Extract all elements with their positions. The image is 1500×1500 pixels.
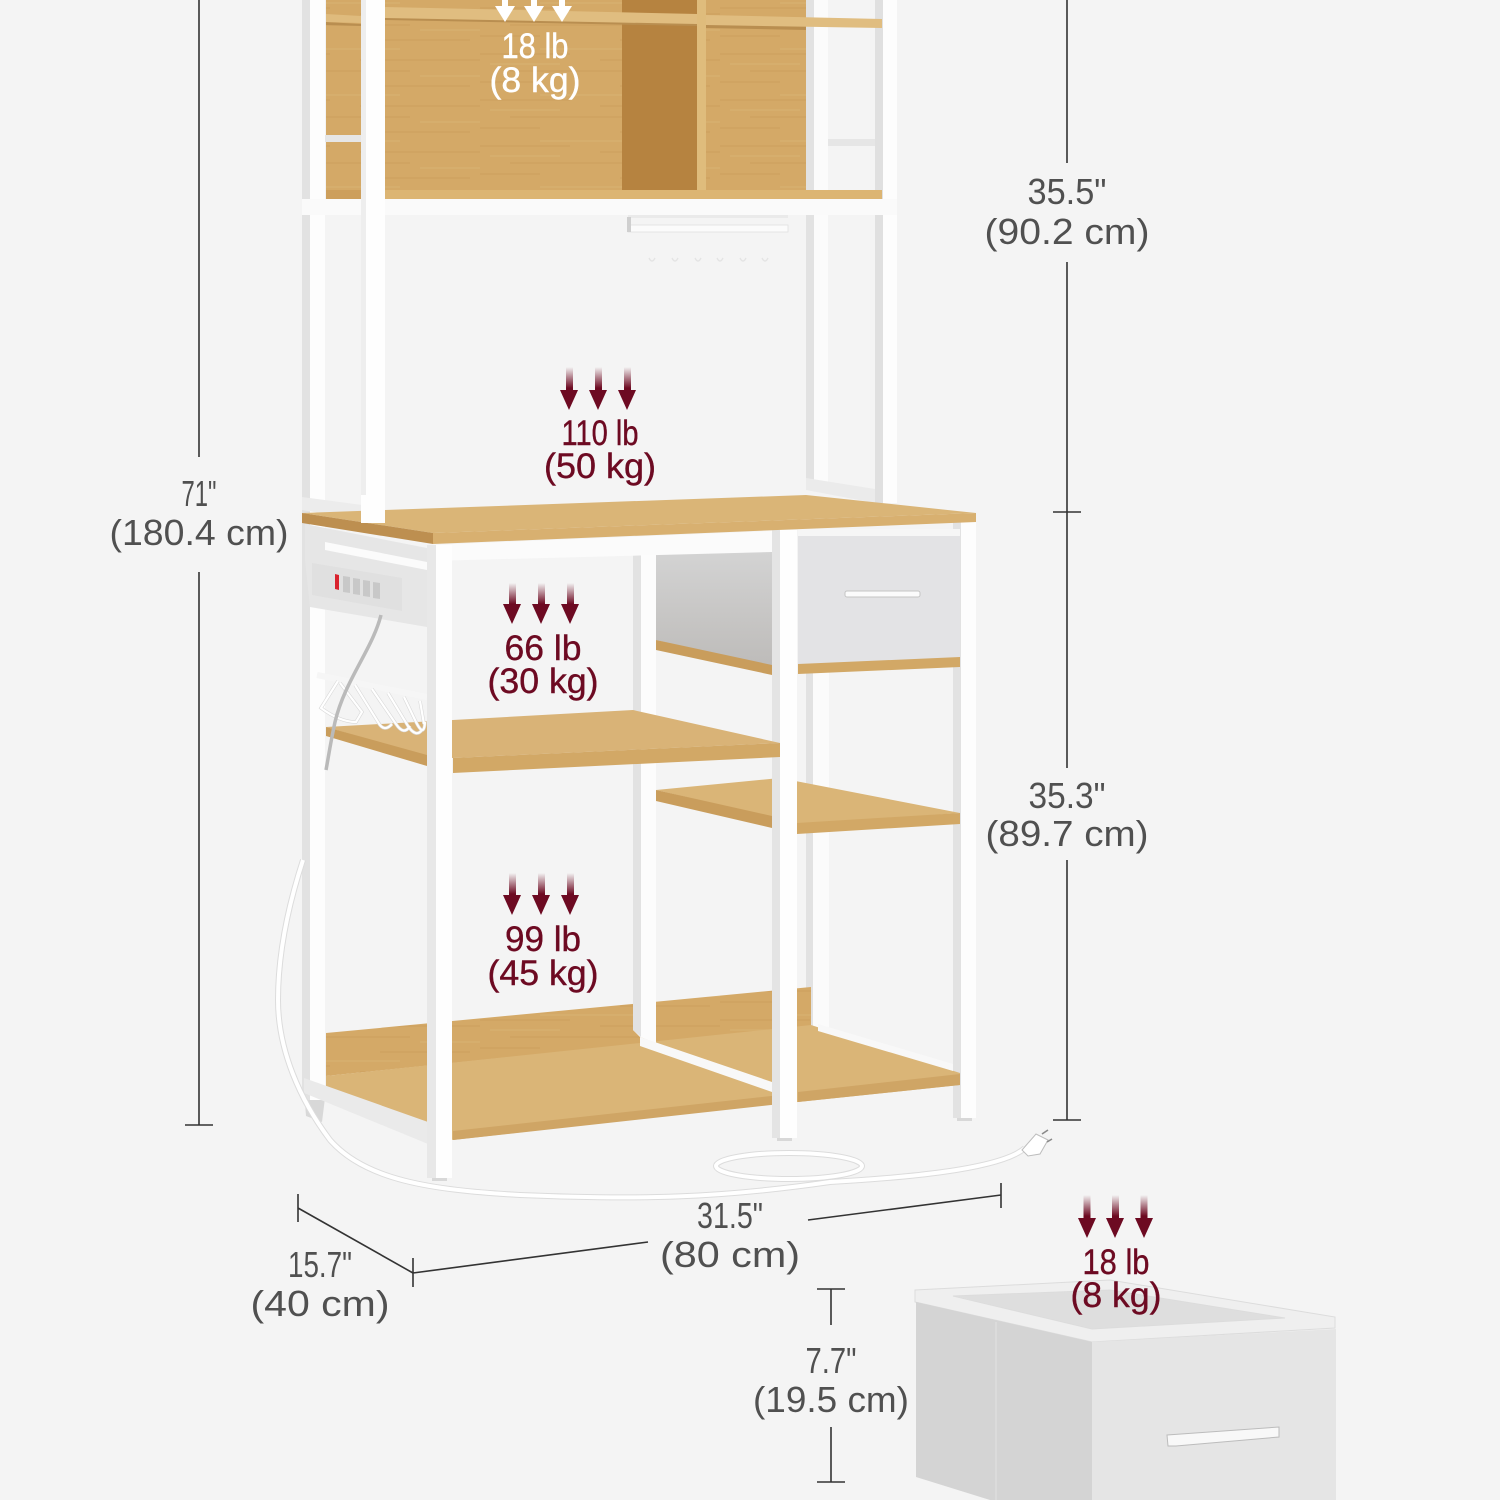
drawer rim (915, 1280, 1335, 1342)
label (488, 629, 598, 701)
upper hutch: back panel (326, 0, 806, 192)
bottom shelf (326, 987, 960, 1140)
weight: drawer 18 lb (1070, 1195, 1162, 1315)
middle shelf (326, 710, 780, 773)
label: 110 lb (562, 414, 638, 453)
dimension: upper height 35.5 in (984, 0, 1150, 512)
label: 18 lb (502, 27, 568, 66)
upper hutch: right bottom rail (806, 478, 875, 503)
label: 99 lb (505, 920, 581, 959)
drawer side (916, 1302, 1092, 1500)
label: (50 kg) (544, 447, 656, 486)
label: 66 lb (504, 629, 582, 668)
arrows (503, 583, 579, 624)
separate fabric drawer (915, 1280, 1336, 1500)
lower frame: front left post (427, 545, 452, 1181)
dimension: width 31.5 in (413, 1183, 1001, 1287)
drawer front (1092, 1329, 1336, 1500)
dimension: total height 71 in: 71" (182, 473, 216, 514)
drawer cavity side panel (656, 548, 772, 675)
weight: middle shelf 66 lb (488, 583, 598, 701)
label: (30 kg) (488, 662, 598, 701)
upper hutch: rear left post (302, 0, 325, 520)
arrows (560, 367, 636, 410)
lower frame: left bottom rail (304, 1078, 428, 1144)
fabric drawer (798, 529, 960, 664)
front left hutch post overlap (361, 495, 385, 523)
hook rail with S-hooks (317, 675, 427, 733)
dimension: width 31.5 in: 31.5" (697, 1195, 763, 1236)
lower right shelf (656, 778, 960, 834)
drawer handle (845, 591, 920, 597)
lower frame: left post (302, 522, 325, 1100)
power strip bracket (305, 524, 427, 627)
lower frame: right post (953, 522, 976, 1121)
label (544, 414, 656, 486)
upper hutch: rear right post (806, 0, 828, 482)
dimension: total height 71 in: (180.4 cm) (110, 512, 288, 553)
shelf under drawer (798, 657, 960, 674)
arrows (1078, 1195, 1153, 1238)
bakers rack: product illustration (278, 0, 1052, 1197)
drawer interior (955, 1288, 1285, 1330)
label (488, 920, 598, 993)
arrows (503, 873, 579, 915)
drawer handle (1167, 1427, 1279, 1446)
power cord: grey run (326, 615, 381, 770)
label: (8 kg) (490, 61, 580, 100)
label: (8 kg) (1070, 1276, 1162, 1315)
table top (302, 495, 976, 544)
rear left foot (304, 1090, 325, 1122)
plug (1022, 1130, 1052, 1156)
dimension: lower height 35.3 in (986, 512, 1148, 1120)
dimension: upper height 35.5 in: (90.2 cm) (984, 211, 1150, 252)
dimension: width 31.5 in: (80 cm) (660, 1234, 800, 1275)
upper hutch: top shelf (326, 7, 882, 30)
power cord (278, 860, 1052, 1197)
dimension: drawer height 7.7 in (753, 1289, 909, 1482)
dimension: drawer height 7.7 in: 7.7" (806, 1340, 856, 1381)
weight: upper shelf 18 lb (490, 0, 580, 100)
upper hutch: left bottom rail (302, 497, 362, 520)
dimension: lower height 35.3 in: 35.3" (1028, 775, 1106, 816)
lower frame: rear right post (806, 665, 829, 1027)
dimension: lower height 35.3 in: (89.7 cm) (986, 813, 1148, 854)
label: 18 lb (1082, 1243, 1150, 1282)
weight: bottom shelf 99 lb (488, 873, 598, 993)
upper hutch: front right post (875, 0, 897, 503)
label (1070, 1243, 1162, 1315)
dimension: drawer height 7.7 in: (19.5 cm) (753, 1379, 909, 1420)
upper hutch: cross beam (302, 199, 897, 215)
label (490, 27, 580, 100)
weight: table top 110 lb (544, 367, 656, 486)
bottom shelf: white support rails (640, 1024, 953, 1092)
lower frame: centre post (772, 530, 797, 1141)
glass holder rail with hooks (627, 215, 788, 261)
dimension: total height 71 in (110, 0, 288, 1125)
dimension: depth 15.7 in: (40 cm) (250, 1283, 390, 1324)
dimension: depth 15.7 in (250, 1194, 413, 1324)
upper hutch: front left post (361, 0, 385, 523)
upper hutch: side rails (316, 135, 876, 146)
arrows (495, 0, 572, 22)
lower frame: rear centre post (633, 552, 656, 1043)
label: (45 kg) (488, 954, 598, 993)
front beam (430, 531, 772, 561)
dimension: upper height 35.5 in: 35.5" (1028, 171, 1106, 212)
upper hutch: lower shelf (326, 190, 882, 200)
power strip (312, 563, 402, 611)
dimension: depth 15.7 in: 15.7" (288, 1244, 352, 1285)
